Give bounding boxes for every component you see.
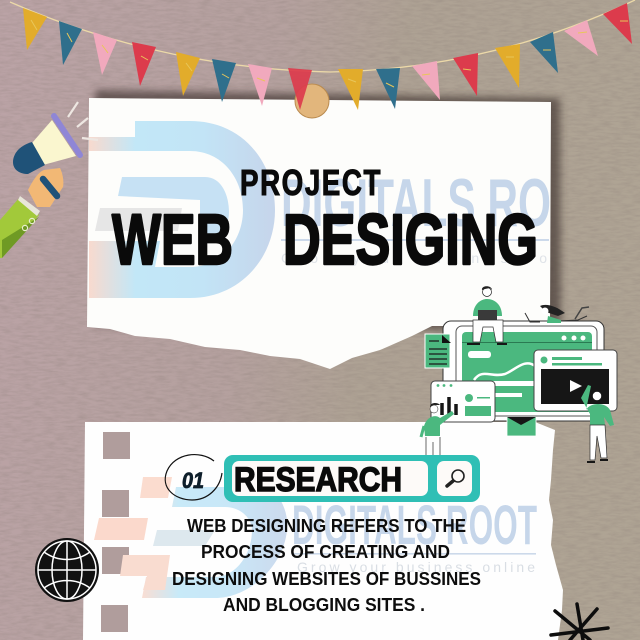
person lying on monitor with laptop xyxy=(525,305,589,323)
step number 01 in hand-drawn circle xyxy=(165,455,222,500)
title: WEB DESIGING: DESIGING xyxy=(283,201,538,280)
video card xyxy=(534,350,617,411)
watermark text lower xyxy=(292,493,537,575)
pin xyxy=(288,68,329,118)
watermark: D logo lower xyxy=(94,470,287,598)
panel: torn top paper note xyxy=(87,90,561,369)
person pointing at video xyxy=(581,385,614,462)
description text: WEB DESIGNING REFERS TO THE xyxy=(187,516,466,536)
chart card xyxy=(431,381,495,422)
watermark text top: Grow your business o xyxy=(281,250,547,266)
watermark text top xyxy=(281,178,550,266)
illustration: team building a website xyxy=(421,286,617,462)
search bar heading: RESEARCH: RESEARCH xyxy=(234,461,402,499)
search bar heading: RESEARCH xyxy=(224,455,480,502)
string of bunting flags xyxy=(10,0,635,110)
description text: AND BLOGGING SITES . xyxy=(223,595,425,615)
description text: PROCESS OF CREATING AND xyxy=(201,542,450,562)
description text: DESIGNING WEBSITES OF BUSSINES xyxy=(172,569,481,589)
step number 01 in hand-drawn circle: 01 xyxy=(182,468,204,493)
icon: globe xyxy=(35,538,99,602)
description text xyxy=(172,516,481,615)
icon: black asterisk doodle xyxy=(551,604,608,640)
panel: lower notebook paper xyxy=(83,422,563,640)
icon: magnifier xyxy=(447,470,464,486)
envelope xyxy=(507,417,536,436)
title: WEB DESIGING: WEB xyxy=(112,201,233,280)
title: WEB DESIGING xyxy=(112,201,538,280)
watermark text lower: Grow your business online xyxy=(297,559,535,575)
icon: hand holding megaphone xyxy=(0,102,98,258)
document icon xyxy=(425,334,451,368)
green browser screen xyxy=(462,332,592,412)
watermark: D logo top xyxy=(89,121,551,298)
person pointing at chart xyxy=(421,403,454,455)
monitor frame xyxy=(443,321,604,421)
title: PROJECT: PROJECT xyxy=(240,162,382,203)
person sitting on monitor with laptop xyxy=(467,286,507,344)
notebook holes xyxy=(101,432,130,632)
